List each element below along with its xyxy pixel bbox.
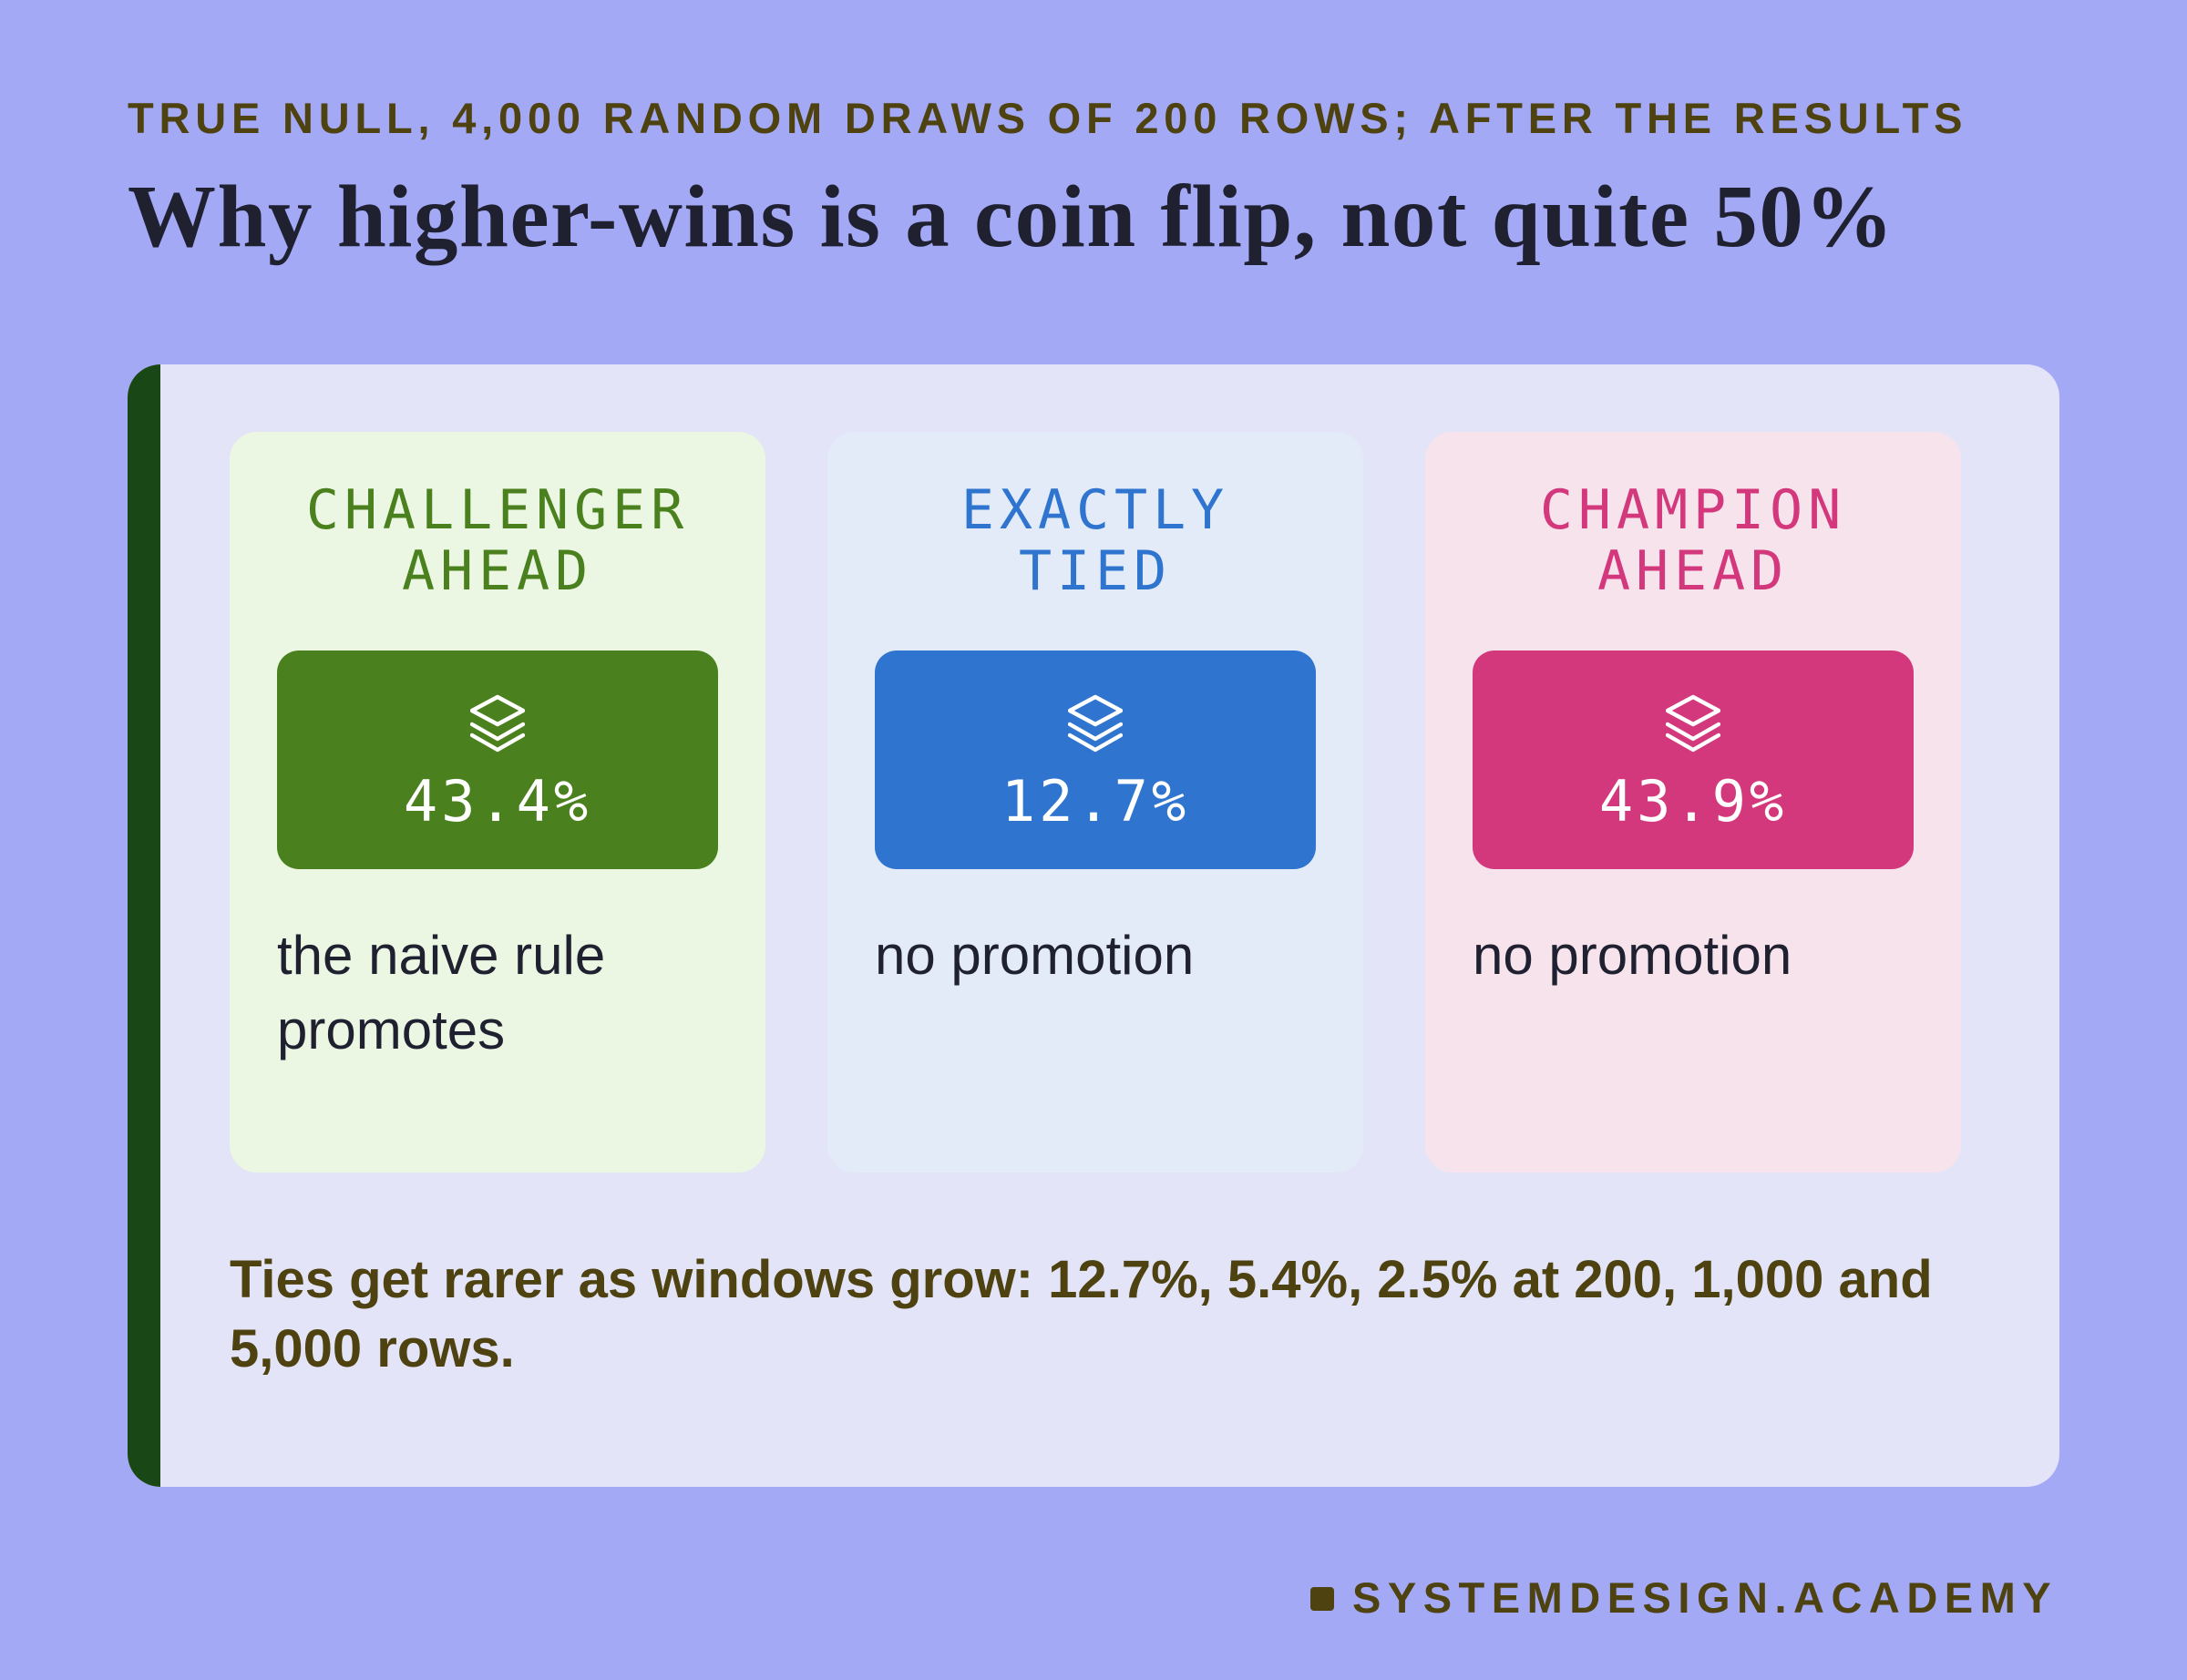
takeaway note: 5,000 rows. (230, 1319, 515, 1378)
brand text: SYSTEMDESIGN.ACADEMY (1352, 1573, 2058, 1622)
text: no promotion: no promotion (875, 925, 1194, 986)
heading: challenger ahead: CHALLENGER (306, 478, 689, 542)
heading: exactly tied: EXACTLY (961, 478, 1229, 542)
text: the naive rule promotes: the naive rule (277, 925, 605, 986)
text: no promotion: no promotion (1473, 925, 1792, 986)
heading: champion ahead (1540, 478, 1846, 603)
eyebrow: TRUE NULL, 4,000 RANDOM DRAWS OF 200 ROWS; AFTER THE RESULTS (128, 94, 1967, 142)
text: the naive rule promotes (277, 925, 605, 1060)
panel: challenger ahead (230, 432, 765, 1173)
icon: layers (470, 694, 525, 753)
heading: exactly tied (961, 478, 1229, 603)
panel: exactly tied (827, 432, 1363, 1173)
brand marker (1310, 1587, 1334, 1611)
heading: champion ahead: AHEAD (1597, 539, 1789, 603)
panel accent bar (128, 364, 160, 1487)
value: 43.4%: 43.4% (404, 768, 591, 835)
main panel (128, 364, 2059, 1487)
title: Why higher-wins is a coin flip, not quite 50% (128, 168, 1894, 265)
metric box: 12.7% (875, 650, 1316, 869)
heading: challenger ahead: AHEAD (402, 539, 593, 603)
panel: champion ahead (1425, 432, 1961, 1173)
text: the naive rule promotes: promotes (277, 999, 505, 1060)
metric box: 43.9% (1473, 650, 1914, 869)
heading: exactly tied: TIED (1019, 539, 1172, 603)
icon: layers (1068, 694, 1123, 753)
heading: challenger ahead (306, 478, 689, 603)
metric box: 43.4% (277, 650, 718, 869)
value: 12.7%: 12.7% (1001, 768, 1189, 835)
icon: layers (1666, 694, 1720, 753)
heading: champion ahead: CHAMPION (1540, 478, 1846, 542)
takeaway note: Ties get rarer as windows grow: 12.7%, 5.4%, 2.5% at 200, 1,000 and (230, 1250, 1933, 1309)
takeaway note (230, 1250, 1933, 1378)
value: 43.9%: 43.9% (1599, 768, 1787, 835)
